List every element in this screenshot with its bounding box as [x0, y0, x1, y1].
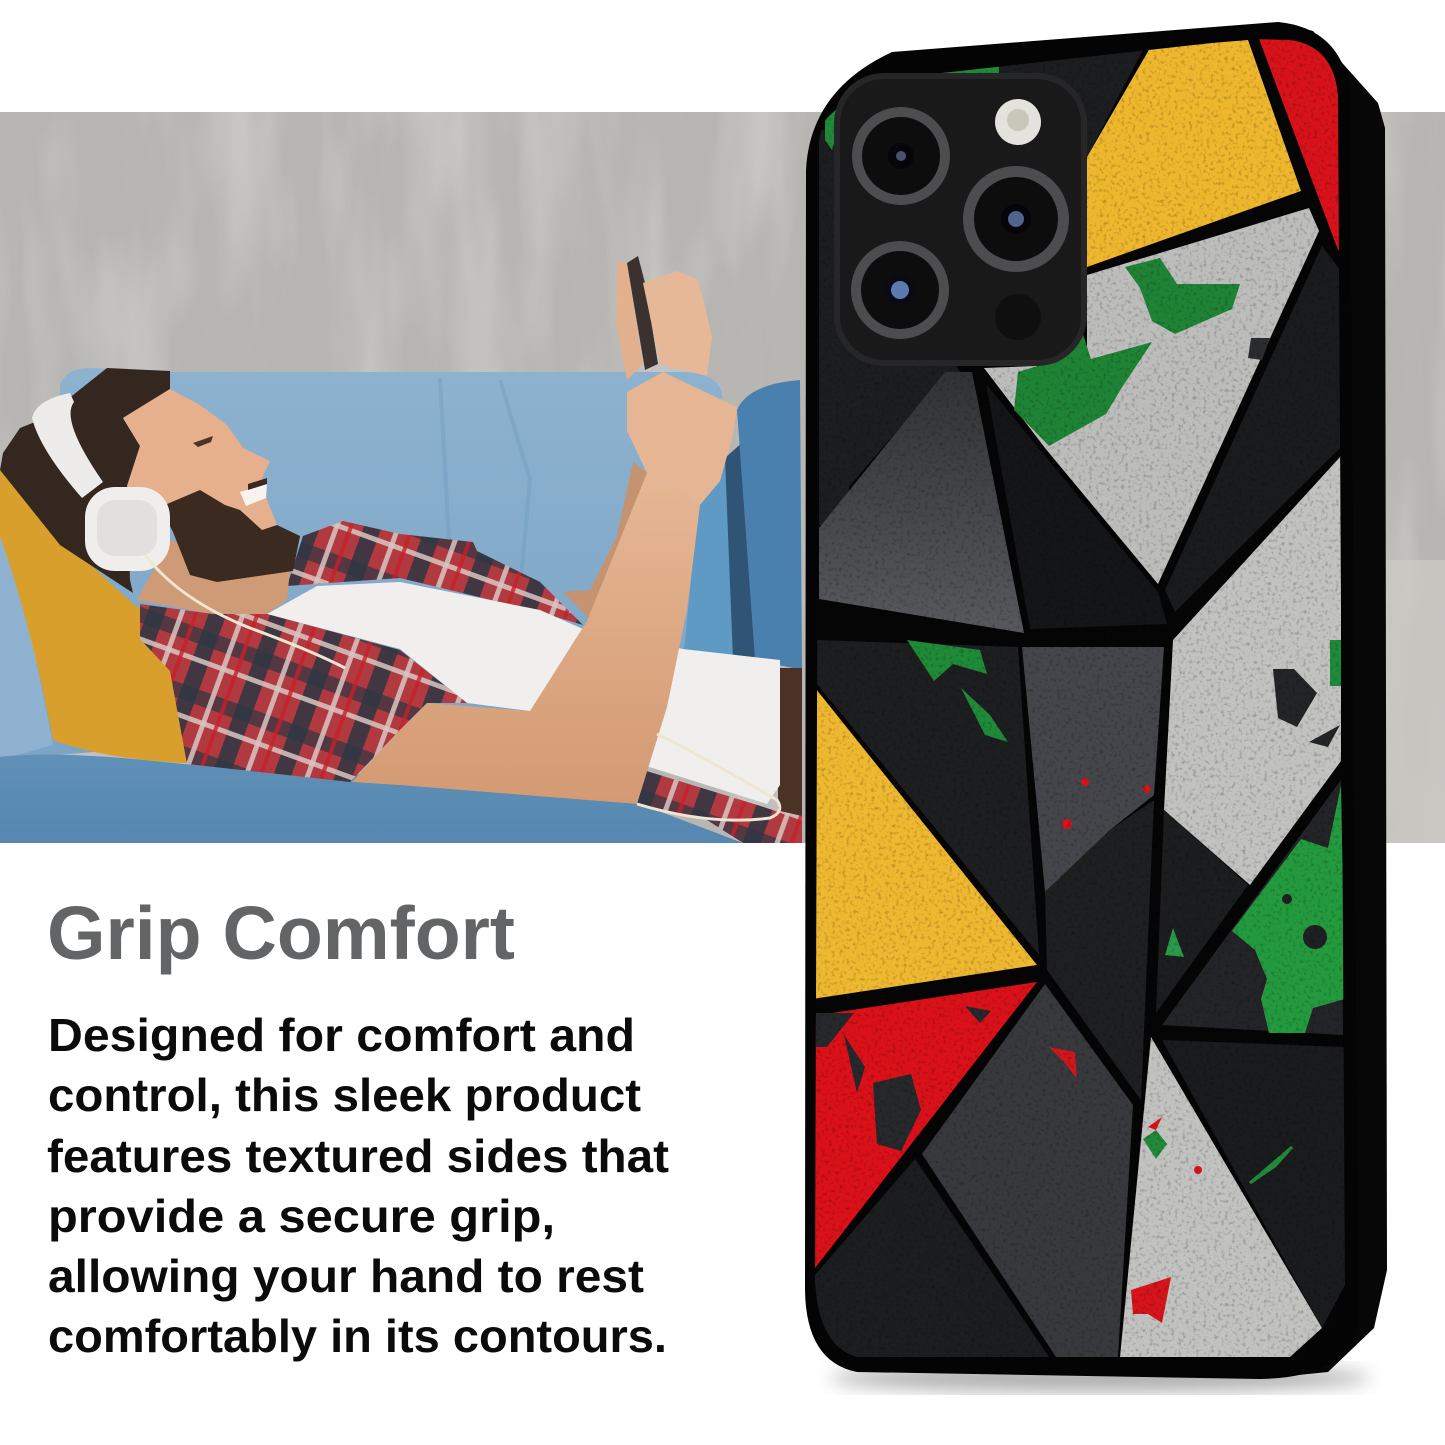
case drop shadow: [830, 1364, 1370, 1392]
smile: [240, 484, 267, 506]
body text: features textured sides that: [47, 1130, 669, 1182]
lens right: [963, 166, 1069, 272]
sofa right cushion: [737, 380, 802, 670]
yellow triangle lower left: [812, 684, 1037, 999]
fist: [627, 372, 737, 505]
grain texture: [810, 36, 1350, 1361]
yellow shard top: [1087, 40, 1301, 267]
sofa seat: [0, 755, 743, 843]
moustache: [248, 478, 267, 490]
plaid shirt body: [140, 604, 467, 782]
dark slab top: [999, 48, 1144, 157]
holes in green patch: [1282, 894, 1327, 949]
man: [0, 256, 802, 843]
dark slab top left: [819, 140, 960, 521]
red splash on slab: [1049, 1047, 1077, 1079]
white t-shirt: [267, 582, 780, 804]
dark mid right: [1156, 810, 1248, 1013]
lens top left: [852, 107, 950, 205]
dark slab bottom right: [1162, 1040, 1345, 1328]
green paint patch: [1232, 785, 1345, 1033]
lens bottom left: [851, 241, 949, 339]
dark slab right upper: [1165, 246, 1340, 612]
holes in pale shard: [1273, 669, 1317, 727]
green and white flecks top left: [825, 63, 999, 150]
green paint lower: [1014, 334, 1152, 446]
dark grey slab bottom centre: [922, 984, 1133, 1357]
dark slab centre: [986, 384, 1167, 629]
far arm: [563, 462, 647, 630]
pale stone shard right: [1164, 456, 1341, 885]
flash: [995, 99, 1041, 145]
dark lower centre slab: [1045, 800, 1154, 1100]
green paint on dark slab: [907, 640, 987, 681]
body text: provide a secure grip,: [48, 1190, 555, 1242]
grey triangle upper left: [819, 372, 1024, 633]
pale stone shard with green: [984, 208, 1319, 584]
earphone cable: [146, 556, 780, 820]
body text: comfortably in its contours.: [48, 1310, 667, 1362]
second hole in pale shard: [1309, 725, 1340, 747]
blue sofa: [0, 368, 802, 843]
body text: Designed for comfort and: [48, 1009, 635, 1061]
red shard top right: [1259, 39, 1345, 250]
neck: [137, 540, 290, 614]
concrete wall background: [0, 112, 1445, 843]
sofa dark gap: [725, 440, 755, 660]
beard: [160, 490, 300, 582]
left sofa arm: [0, 536, 53, 760]
plaid shirt collar and shoulder: [287, 521, 583, 625]
case black outer rim: [805, 22, 1358, 1379]
sensor: [995, 294, 1041, 340]
dark slab left centre: [817, 640, 1039, 955]
heading: Grip Comfort: [47, 891, 515, 975]
body text: control, this sleek product: [48, 1069, 641, 1121]
fingers: [643, 271, 712, 376]
green blob: [1165, 928, 1184, 957]
upper hand palm: [617, 263, 643, 380]
green paint upper: [1125, 258, 1240, 334]
dark triangle with green paint: [1162, 780, 1343, 1035]
body text: allowing your hand to rest: [48, 1250, 644, 1302]
green streak: [961, 688, 1008, 742]
lower shirt hem: [637, 769, 802, 843]
green and red flecks on pale triangle: [1143, 1117, 1202, 1174]
yellow pillow: [0, 468, 187, 764]
case side wall: [1100, 22, 1387, 1379]
trousers: [778, 668, 802, 818]
phone held in hand: [627, 256, 658, 370]
green sliver: [1330, 640, 1341, 686]
dark slab bottom left: [815, 1159, 1049, 1357]
red paint spot: [1131, 1277, 1171, 1323]
phone case: [805, 22, 1387, 1392]
holes in red triangle: [815, 1006, 991, 1151]
forearm: [352, 473, 700, 804]
grey centre slab: [1022, 647, 1164, 892]
green streak bottom right: [1250, 1147, 1292, 1183]
eye: [193, 436, 213, 447]
lifestyle photo: man relaxing on sofa: [0, 112, 1445, 843]
sofa right section: [684, 462, 733, 654]
dark chip on pale shard: [1248, 338, 1270, 360]
pale triangle bottom: [1120, 1037, 1322, 1357]
sofa back pleats: [440, 378, 530, 590]
printed back design: [810, 36, 1350, 1361]
headphones: [32, 393, 170, 571]
body text: [47, 1009, 669, 1362]
hair: [0, 368, 170, 593]
red dots on grey slab: [1062, 778, 1151, 829]
face: [123, 389, 277, 540]
camera module: [834, 73, 1087, 366]
red triangle lower left: [812, 982, 1037, 1272]
